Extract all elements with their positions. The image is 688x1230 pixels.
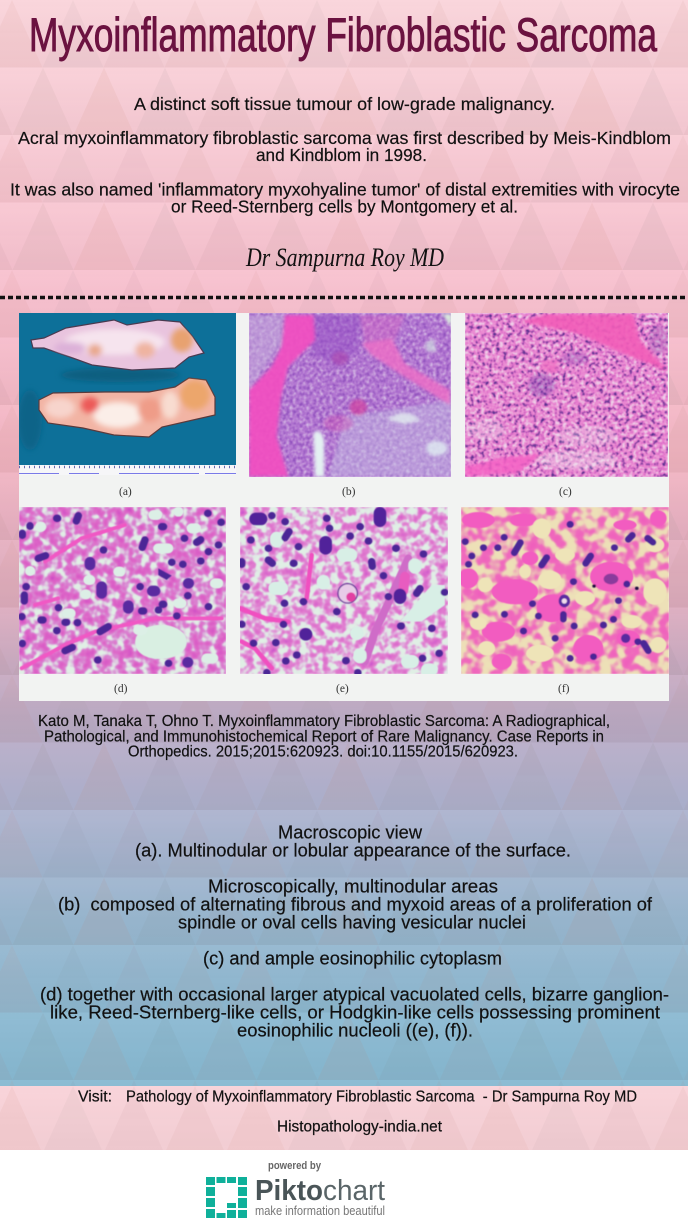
description text block: (d) together with occasional larger atypical vacuolated cells, bizarre ganglion-	[40, 985, 669, 1005]
footer links: Histopathology-india.net	[277, 1118, 443, 1136]
description text block: (b) composed of alternating fibrous and myxoid areas of a proliferation of	[58, 895, 653, 915]
photo e: atypical cells	[240, 507, 448, 674]
description text block: eosinophilic nucleoli ((e), (f)).	[237, 1021, 473, 1041]
photo b: low power histology	[249, 313, 452, 477]
branding: powered by Piktochart: powered by	[268, 1160, 322, 1172]
figure captions	[114, 486, 572, 695]
footer links: Pathology of Myxoinflammatory Fibroblastic Sarcoma - Dr Sampurna Roy MD	[126, 1088, 637, 1106]
branding: powered by Piktochart: Pikto	[255, 1175, 323, 1207]
branding: powered by Piktochart: make information beautiful	[255, 1204, 385, 1218]
author signature: Dr Sampurna Roy MD	[245, 243, 444, 272]
citation: Pathological, and Immunohistochemical Report of Rare Malignancy. Case Reports in	[44, 728, 604, 746]
intro text block: It was also named 'inflammatory myxohyaline tumor' of distal extremities with virocyte	[10, 180, 680, 200]
photo a: macroscopic specimen	[18, 313, 236, 475]
icon: Piktochart logo	[206, 1177, 247, 1218]
footer links	[78, 1088, 637, 1136]
description text block: (a). Multinodular or lobular appearance of the surface.	[135, 841, 571, 861]
figure captions: (b)	[342, 486, 356, 498]
white branding strip	[0, 1150, 688, 1230]
figure captions: (e)	[336, 683, 349, 695]
figure captions: (f)	[558, 683, 570, 695]
figure captions: (d)	[114, 683, 128, 695]
footer links: Visit:	[78, 1088, 112, 1106]
citation: Kato M, Tanaka T, Ohno T. Myxoinflammatory Fibroblastic Sarcoma: A Radiographical,	[38, 713, 610, 730]
intro text block: or Reed-Sternberg cells by Montgomery et al.	[171, 196, 518, 216]
description text block: (c) and ample eosinophilic cytoplasm	[203, 948, 502, 968]
description text block	[40, 823, 669, 1041]
figure captions: (a)	[119, 486, 132, 498]
intro text block: A distinct soft tissue tumour of low-grade malignancy.	[134, 94, 555, 114]
description text block: like, Reed-Sternberg-like cells, or Hodgkin-like cells possessing prominent	[50, 1003, 660, 1023]
citation: Orthopedics. 2015;2015:620923. doi:10.1155/2015/620923.	[128, 744, 518, 760]
description text block: Macroscopic view	[278, 823, 423, 843]
photo d: vacuolated cells	[19, 507, 226, 674]
footer band background	[0, 1086, 688, 1150]
intro text block	[10, 94, 680, 216]
branding: powered by Piktochart	[206, 1160, 385, 1218]
citation	[38, 713, 610, 760]
photo c: medium power histology	[465, 313, 668, 477]
branding: powered by Piktochart: chart	[323, 1175, 385, 1207]
panel: micrograph figure	[18, 313, 669, 701]
dotted divider	[0, 296, 688, 299]
description text block: spindle or oval cells having vesicular nuclei	[178, 913, 526, 933]
description text block: Microscopically, multinodular areas	[208, 877, 498, 897]
intro text block: Acral myxoinflammatory fibroblastic sarcoma was first described by Meis-Kindblom	[18, 128, 671, 148]
figure captions: (c)	[559, 486, 572, 498]
photo f: eosinophilic cells on pale matrix	[458, 507, 669, 674]
intro text block: and Kindblom in 1998.	[256, 145, 427, 165]
